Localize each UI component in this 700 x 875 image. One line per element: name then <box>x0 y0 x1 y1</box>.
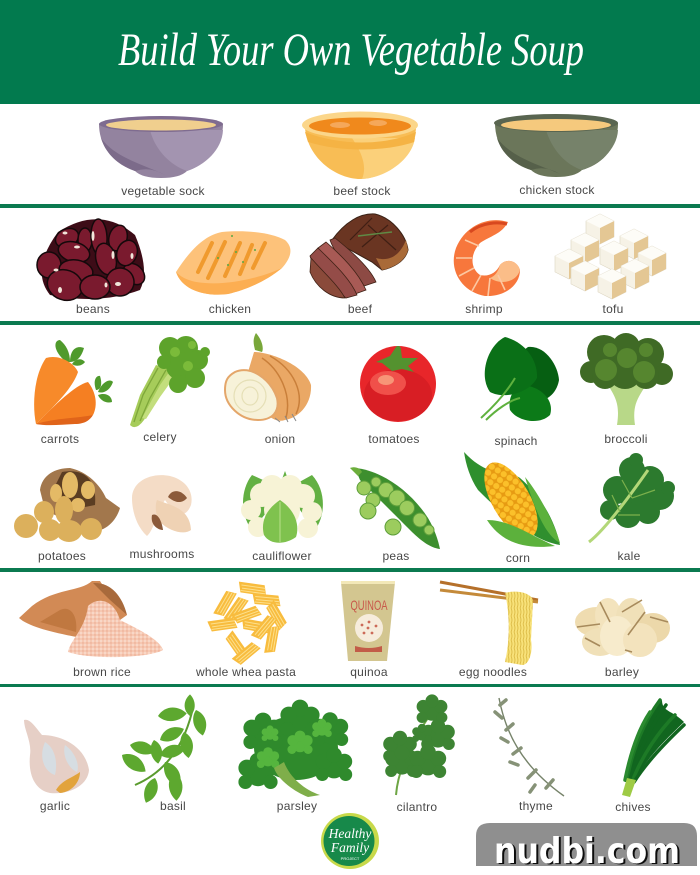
item: cauliflower: cauliflower <box>252 549 312 563</box>
item: celery: celery <box>143 430 177 444</box>
logo: Healthy Family Project: PROJECT <box>341 856 360 861</box>
item: onion: onion <box>265 432 295 446</box>
item: chives: chives <box>615 800 651 814</box>
item: beans: beans <box>76 302 110 316</box>
item: carrots: carrots <box>41 432 79 446</box>
item: pasta <box>195 582 296 679</box>
item: pasta: whole whea pasta <box>195 665 296 679</box>
item: barley <box>575 598 670 679</box>
item: celery <box>130 336 210 444</box>
item: broccoli <box>580 333 673 446</box>
item: chicken <box>176 231 290 316</box>
item: brown rice <box>19 581 163 679</box>
item: shrimp: shrimp <box>465 302 503 316</box>
item: kale <box>589 453 675 563</box>
panel: proteins <box>37 214 666 316</box>
section rule: vegetables / grains <box>0 568 700 572</box>
item: corn: corn <box>506 551 530 565</box>
item: tofu <box>555 214 666 316</box>
item: quinoa package: quinoa <box>350 665 388 679</box>
panel: stocks <box>99 112 618 198</box>
item: cilantro <box>383 694 455 814</box>
item: carrots <box>34 340 113 446</box>
item: peas <box>350 467 440 563</box>
item: beef: beef <box>348 302 373 316</box>
item: kale: kale <box>617 549 641 563</box>
header banner <box>0 0 700 104</box>
item: chives <box>615 700 684 814</box>
item: broccoli: broccoli <box>604 432 648 446</box>
item: peas: peas <box>382 549 410 563</box>
item: cauliflower <box>241 471 323 563</box>
item: brown rice: brown rice <box>73 665 131 679</box>
item: cilantro: cilantro <box>397 800 437 814</box>
item: parsley: parsley <box>277 799 317 813</box>
item: vegetable stock bowl: vegetable sock <box>121 184 206 198</box>
item: quinoa package <box>341 581 395 679</box>
item: egg noodles <box>440 582 538 679</box>
item: shrimp <box>454 220 520 316</box>
logo: Healthy Family Project <box>321 813 379 869</box>
item: thyme <box>495 698 564 813</box>
item: chicken stock bowl: chicken stock <box>519 183 595 197</box>
item: parsley <box>238 700 352 813</box>
section rule: grains / herbs <box>0 684 700 687</box>
item: mushroom: mushrooms <box>130 547 194 561</box>
logo: Healthy Family Project: Family <box>330 840 369 855</box>
item: chicken stock bowl <box>494 114 618 197</box>
item: quinoa package: QUINOA <box>350 597 388 613</box>
panel: vegetables <box>14 333 675 565</box>
item: beef <box>310 214 408 316</box>
item: mushroom <box>130 475 194 561</box>
item: tomato: tomatoes <box>368 432 420 446</box>
panel: grains <box>19 581 670 679</box>
item: beef stock bowl: beef stock <box>333 184 391 198</box>
item: garlic <box>24 720 89 813</box>
item: onion <box>225 333 311 446</box>
item: basil: basil <box>160 799 186 813</box>
item: corn <box>464 452 560 565</box>
item: garlic: garlic <box>40 799 70 813</box>
item: chicken: chicken <box>209 302 251 316</box>
item: beans <box>37 219 149 316</box>
item: beef stock bowl <box>302 112 418 198</box>
item: potatoes <box>14 468 120 563</box>
item: potatoes: potatoes <box>38 549 86 563</box>
item: tomato <box>360 346 436 446</box>
panel: herbs <box>24 694 684 814</box>
section rule: proteins / vegetables <box>0 321 700 325</box>
item: spinach <box>481 337 559 448</box>
item: thyme: thyme <box>519 799 553 813</box>
item: tofu: tofu <box>602 302 624 316</box>
item: egg noodles: egg noodles <box>459 665 527 679</box>
logo: Healthy Family Project: Healthy <box>328 826 371 841</box>
item: spinach: spinach <box>494 434 538 448</box>
item: vegetable stock bowl <box>99 116 223 198</box>
item: barley: barley <box>605 665 639 679</box>
item: basil <box>118 694 209 813</box>
section rule: stocks / proteins <box>0 204 700 208</box>
